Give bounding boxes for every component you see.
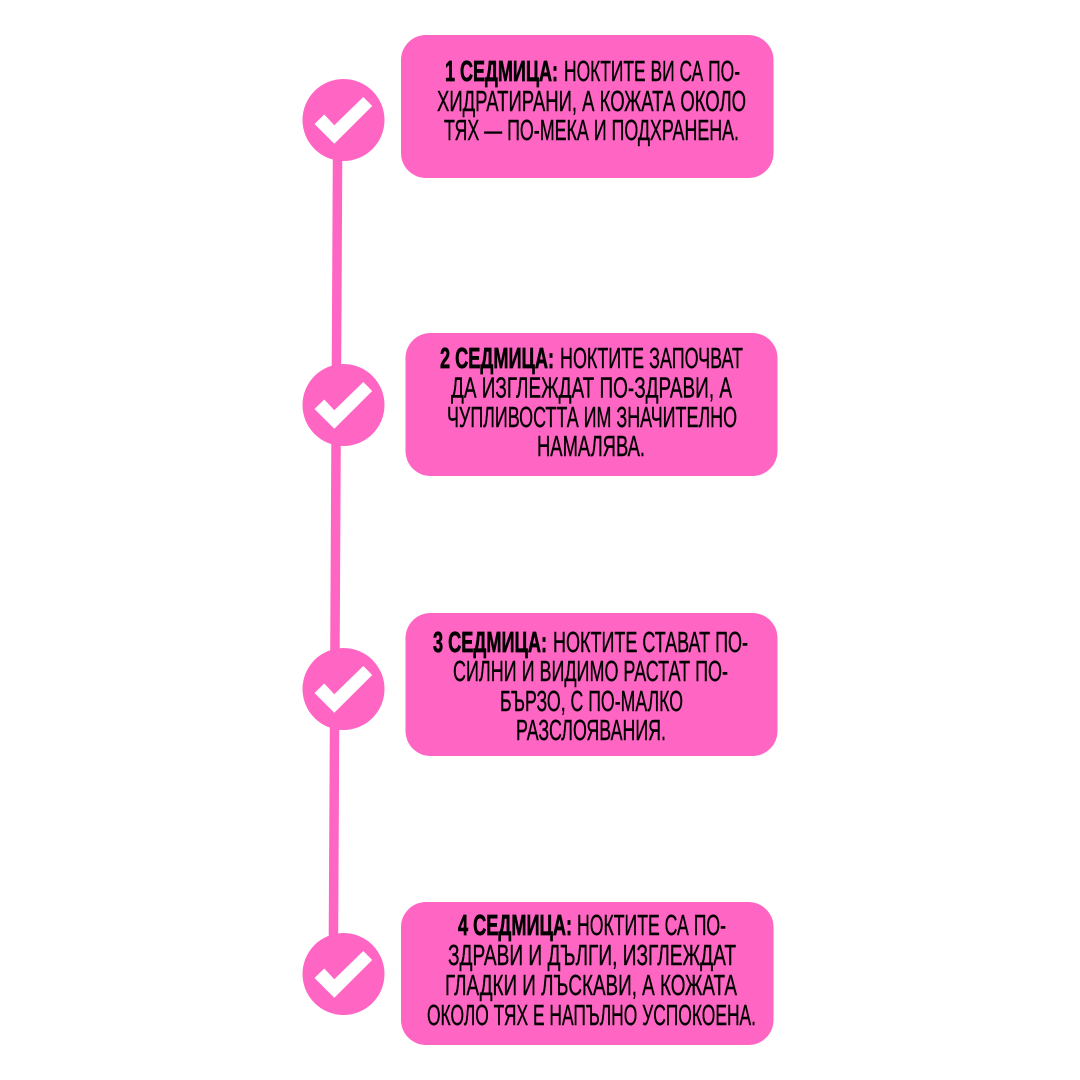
text: week 2 description: ЧУПЛИВОСТТА ИМ ЗНАЧИТЕЛНО: [447, 402, 737, 434]
text: week 2 description: 2 СЕДМИЦА:: [440, 343, 554, 375]
text: week 1 description: НОКТИТЕ ВИ СА ПО-: [564, 56, 740, 88]
step 4 marker: [302, 933, 384, 1015]
text: week 3 description: РАЗСЛОЯВАНИЯ.: [516, 715, 666, 747]
icon: check mark 4: [314, 951, 372, 998]
text: week 4 description: ЗДРАВИ И ДЪЛГИ, ИЗГЛЕЖДАТ: [448, 940, 736, 972]
icon: check mark 1: [314, 97, 372, 144]
text: week 4 description: ОКОЛО ТЯХ Е НАПЪЛНО УСПОКОЕНА.: [427, 1000, 756, 1032]
panel: week 3: [406, 613, 778, 756]
text: week 2 description: НАМАЛЯВА.: [537, 431, 645, 463]
text: week 4 description: НОКТИТЕ СА ПО-: [577, 910, 726, 942]
step 3 marker: [302, 648, 384, 730]
text: week 1 description: [437, 56, 746, 147]
timeline connector line: [328, 120, 342, 974]
icon: check mark 2: [314, 382, 372, 429]
text: week 3 description: [433, 627, 748, 747]
text: week 1 description: 1 СЕДМИЦА:: [445, 56, 558, 88]
text: week 4 description: 4 СЕДМИЦА:: [458, 910, 572, 942]
text: week 1 description: ТЯХ — ПО-МЕКА И ПОДХРАНЕНА.: [444, 115, 739, 147]
text: week 2 description: [440, 343, 743, 463]
text: week 2 description: НОКТИТЕ ЗАПОЧВАТ: [560, 343, 743, 375]
text: week 2 description: ДА ИЗГЛЕЖДАТ ПО-ЗДРАВИ, А: [451, 372, 732, 404]
text: week 3 description: СИЛНИ И ВИДИМО РАСТАТ ПО-: [453, 656, 728, 688]
text: week 4 description: [427, 910, 756, 1032]
text: week 4 description: ГЛАДКИ И ЛЪСКАВИ, А КОЖАТА: [445, 970, 737, 1002]
text: week 3 description: 3 СЕДМИЦА:: [433, 627, 547, 659]
text: week 1 description: ХИДРАТИРАНИ, А КОЖАТА ОКОЛО: [437, 86, 746, 118]
step 2 marker: [302, 364, 384, 446]
step 1 marker: [302, 79, 384, 161]
text: week 3 description: БЪРЗО, С ПО-МАЛКО: [500, 686, 683, 718]
panel: week 2: [406, 333, 778, 476]
icon: check mark 3: [314, 666, 372, 713]
text: week 3 description: НОКТИТЕ СТАВАТ ПО-: [553, 627, 748, 659]
panel: week 1: [401, 35, 774, 178]
panel: week 4: [401, 902, 774, 1045]
